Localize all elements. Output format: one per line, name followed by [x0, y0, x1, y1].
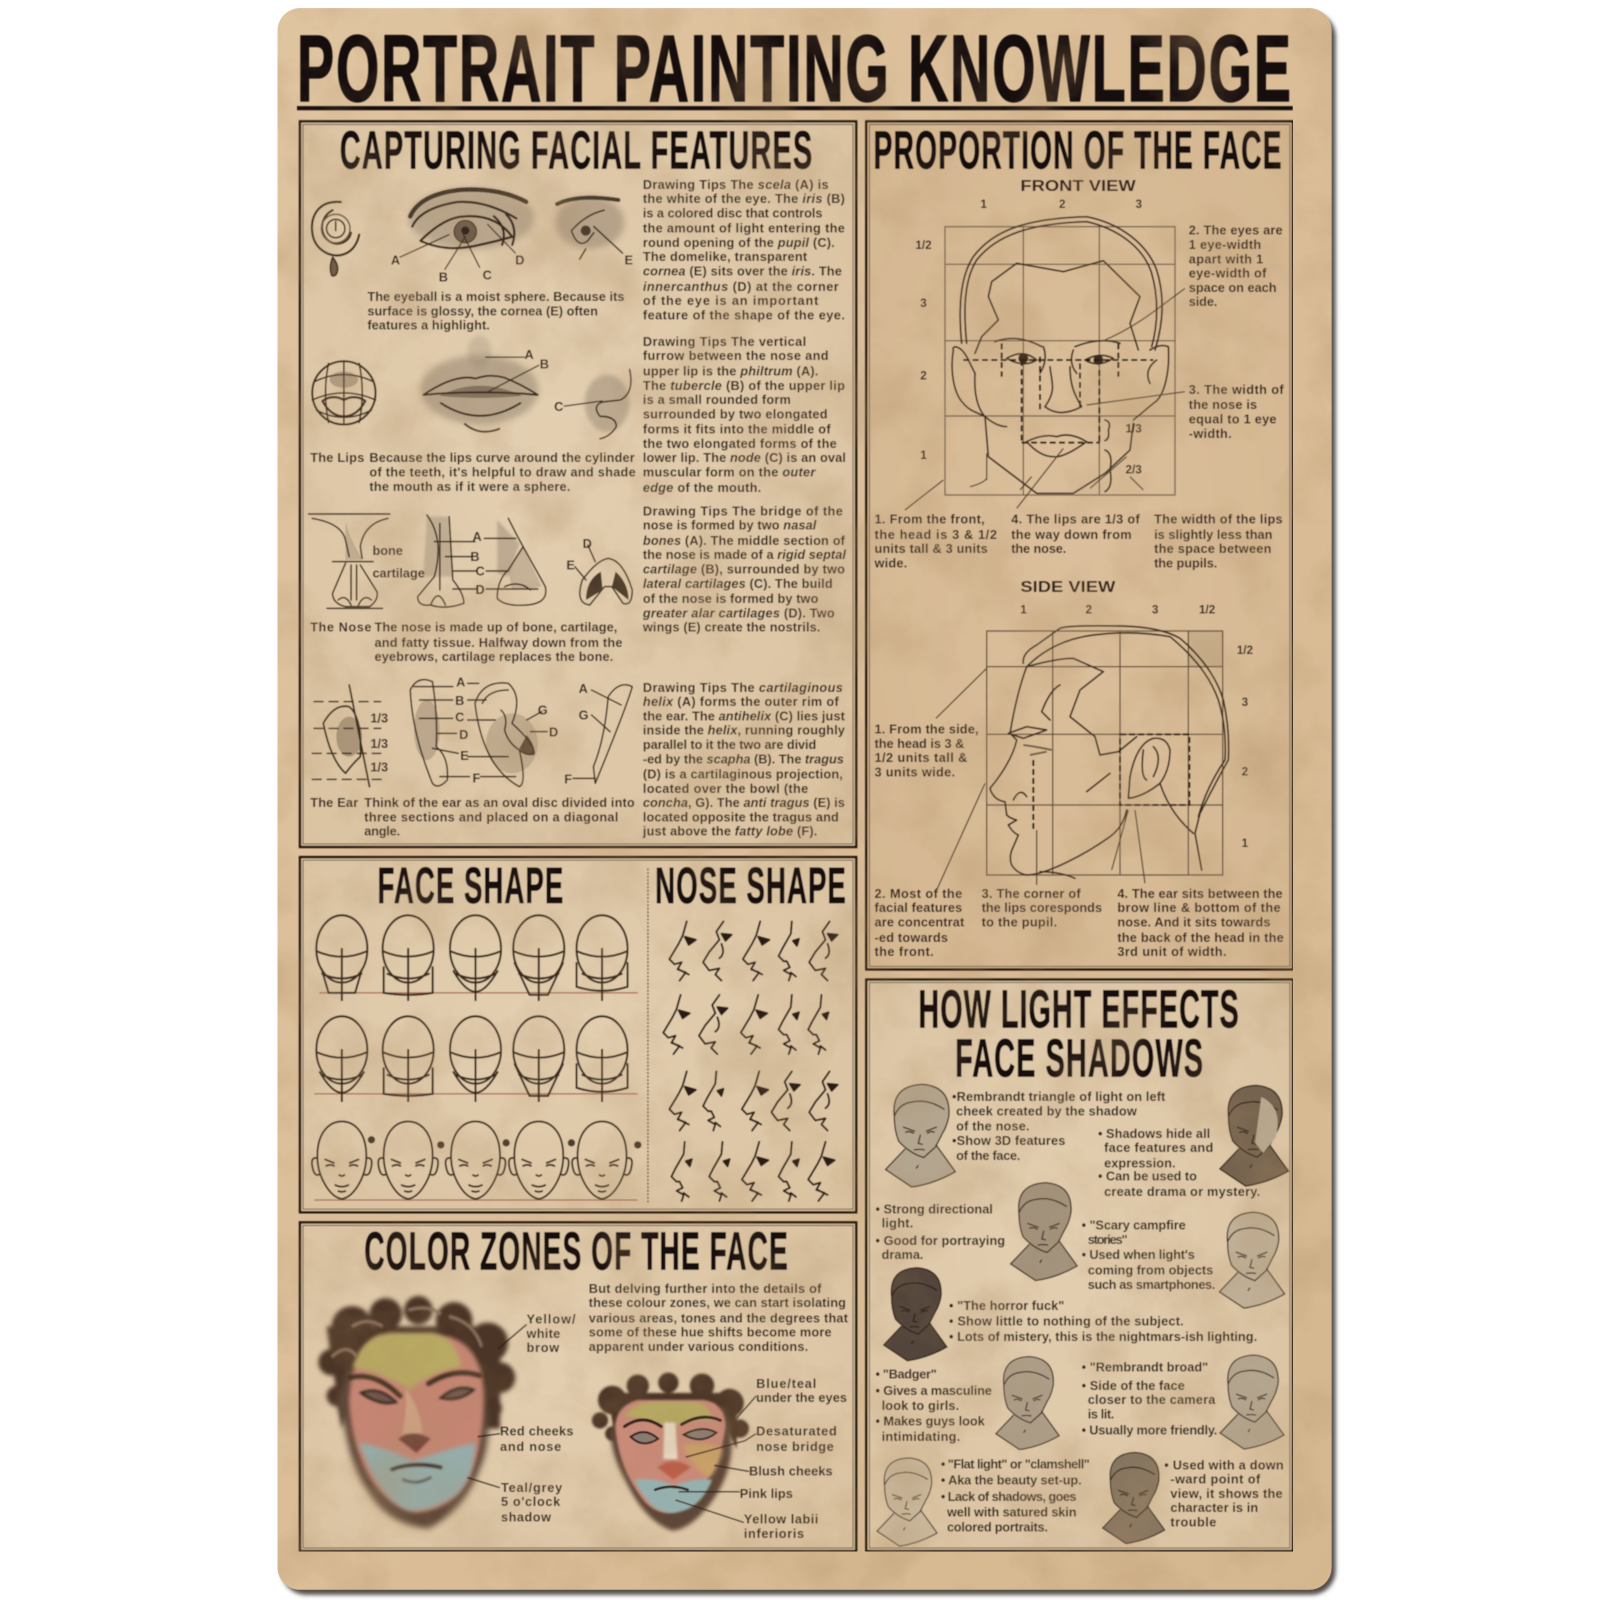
text: scary campfire: stories" — [1088, 1232, 1128, 1247]
labels: eye parts: A — [391, 252, 400, 267]
heading: capturing facial features: CAPTURING FACIAL FEATURES — [340, 120, 813, 180]
labels: front view units: 1 — [980, 198, 987, 211]
illustration: small face with colour zones — [592, 1372, 756, 1531]
text: nose drawing tips: greater alar cartilages (D). Two — [642, 605, 835, 620]
text: lips corner note: to the pupil. — [982, 915, 1057, 930]
text: ear caption — [310, 795, 635, 839]
text: colour zones intro: these colour zones, we can start isolating — [589, 1295, 846, 1310]
text: lips position note: the way down from — [1011, 527, 1132, 542]
panel: proportion of the face: 1/2 — [1199, 603, 1216, 616]
text: lips drawing tips: the two elongated forms of the — [643, 436, 837, 451]
panel: proportion of the face: 3 — [1136, 198, 1143, 211]
text: eye spacing note: side. — [1189, 294, 1217, 309]
text: ear drawing tips: helix (A) forms the outer rim of — [643, 694, 840, 709]
text: eyeball caption: features a highlight. — [367, 318, 490, 333]
panel: proportion of the face: 1 — [920, 449, 927, 462]
text: colour zones intro — [589, 1281, 849, 1354]
text: rembrandt broad: • Usually more friendly. — [1082, 1423, 1217, 1438]
text: ear drawing tips: the ear. The antihelix (C) lies just — [643, 708, 846, 723]
chart: front view face on grid — [905, 217, 1185, 510]
text: strong directional: light. — [882, 1216, 913, 1231]
text: front measurements note: 1. From the front, — [874, 511, 985, 526]
text: colour zones intro: But delving further into the details of — [589, 1281, 822, 1296]
text: facial features note — [874, 886, 965, 959]
labels: small face zones: Blush cheeks — [749, 1464, 833, 1479]
text: eye spacing note: space on each — [1189, 280, 1277, 295]
panel: capturing facial features: A — [472, 529, 482, 544]
text: colour zones intro: apparent under various conditions. — [589, 1339, 808, 1354]
text: lips width note: is slightly less than — [1154, 527, 1272, 542]
labels: large face zones: Teal/grey — [501, 1480, 563, 1495]
icon: bust downward — [1103, 1452, 1165, 1544]
text: nose width note: the nose is — [1189, 397, 1257, 412]
text: rembrandt broad — [1082, 1359, 1217, 1438]
panel: color zones of the face — [300, 1221, 856, 1551]
panel: capturing facial features: 1/3 — [370, 759, 388, 774]
text: facial features note: facial features — [874, 900, 962, 915]
text: eye drawing tips: Drawing Tips The scela (A) is — [643, 177, 829, 192]
text: nose drawing tips: lateral cartilages (C). The build — [643, 576, 833, 591]
panel: capturing facial features: A — [456, 675, 465, 690]
text: eyeball caption — [367, 289, 624, 333]
text: nose caption: The Nose — [310, 620, 371, 635]
panel: capturing facial features: B — [455, 693, 464, 708]
panel: capturing facial features: 1/3 — [370, 736, 388, 751]
text: flat light: • Aka the beauty set-up. — [941, 1473, 1082, 1488]
text: ear caption: three sections and placed on a diagonal — [364, 809, 618, 824]
labels: nose parts: bone — [372, 543, 403, 558]
heading: how light effects face shadows: HOW LIGHT EFFECTS — [918, 980, 1240, 1040]
text: horror: • Show little to nothing of the subject. — [949, 1314, 1184, 1329]
panel: capturing facial features: E — [460, 748, 469, 763]
text: downward view — [1164, 1457, 1284, 1530]
panel: proportion of the face: 2 — [1086, 603, 1093, 616]
illustration: large face with colour zones — [318, 1296, 527, 1529]
text: downward view: view, it shows the — [1170, 1486, 1283, 1501]
text: horror: • "The horror fuck" — [949, 1298, 1064, 1313]
text: nose drawing tips: wings (E) create the nostrils. — [642, 620, 820, 635]
text: nose drawing tips: bones (A). The middle section of — [643, 533, 846, 548]
panel: proportion of the face: 1/2 — [915, 239, 932, 252]
text: side measurements note: 1. From the side, — [874, 722, 979, 737]
text: eye drawing tips: cornea (E) sits over the iris. The — [643, 264, 842, 279]
text: eyeball caption: The eyeball is a moist sphere. Because its — [367, 289, 624, 304]
icon: bust dark shadow — [1220, 1085, 1288, 1186]
text: nose drawing tips: Drawing Tips The bridge of the — [643, 503, 843, 518]
text: nose caption: eyebrows, cartilage replaces the bone. — [374, 649, 613, 664]
panel: capturing facial features: A — [579, 681, 588, 696]
text: ear caption: The Ear — [310, 795, 358, 810]
text: rembrandt broad: • "Rembrandt broad" — [1082, 1359, 1208, 1374]
text: badger — [876, 1367, 992, 1444]
panel: how light effects face shadows — [866, 980, 1293, 1551]
text: side measurements note — [874, 722, 979, 780]
icon: bust flat light — [877, 1458, 937, 1546]
panel: capturing facial features: D — [476, 582, 485, 597]
text: lips position note: the nose. — [1011, 541, 1066, 556]
panel: capturing facial features: G — [579, 707, 589, 722]
text: lips width note: the pupils. — [1154, 555, 1217, 570]
heading: color zones of the face: COLOR ZONES OF THE FACE — [364, 1221, 789, 1281]
poster content — [297, 16, 1293, 1551]
text: strong directional: drama. — [882, 1247, 923, 1262]
text: lips corner note: the lips coresponds — [982, 900, 1102, 915]
text: rembrandt broad: • Side of the face — [1082, 1378, 1185, 1393]
text: rembrandt broad: is lit. — [1088, 1406, 1114, 1421]
labels: small face zones: nose bridge — [756, 1439, 834, 1454]
icon: bust directional — [1011, 1183, 1077, 1281]
panel: capturing facial features: B — [439, 270, 448, 285]
text: badger: • Makes guys look — [876, 1414, 986, 1429]
icon: side view of eye — [555, 196, 624, 259]
text: scary campfire: • "Scary campfire — [1082, 1218, 1186, 1233]
text: eye drawing tips: round opening of the pupil (C). — [643, 235, 835, 250]
labels: lip parts: A — [524, 347, 534, 362]
labels: large face zones: shadow — [501, 1509, 551, 1524]
text: lips width note: the space between — [1154, 541, 1271, 556]
panel: proportion of the face: 1/2 — [1237, 644, 1254, 657]
text: shadows: create drama or mystery. — [1104, 1184, 1260, 1199]
text: flat light: colored portraits. — [947, 1520, 1048, 1535]
text: ear drawing tips — [642, 680, 846, 839]
text: lips caption: The Lips — [310, 450, 364, 465]
text: ear position note: 3rd unit of width. — [1117, 944, 1227, 959]
text: flat light: • "Flat light" or "clamshell" — [941, 1456, 1090, 1471]
text: shadows: • Can be used to — [1098, 1169, 1197, 1184]
text: lips drawing tips — [643, 334, 846, 495]
text: nose drawing tips: the nose is made of a rigid septal — [643, 547, 846, 562]
text: facial features note: 2. Most of the — [874, 886, 962, 901]
labels: large face zones: Yellow/ — [527, 1311, 576, 1326]
heading: face shape: FACE SHAPE — [378, 857, 564, 914]
chart: nose shapes grid — [663, 921, 838, 1201]
text: facial features note: the front. — [874, 944, 934, 959]
text: ear caption: angle. — [364, 824, 400, 839]
panel: face shape and nose shape — [300, 857, 856, 1212]
text: nose width note: 3. The width of — [1189, 382, 1284, 397]
text: lips width note — [1154, 511, 1283, 570]
text: nose caption: The nose is made up of bone, cartilage, — [374, 620, 617, 635]
panel: capturing facial features: B — [470, 549, 480, 564]
text: ear position note: nose. And it sits towards — [1117, 915, 1270, 930]
icon: lips sphere — [312, 361, 376, 424]
text: side measurements note: the head is 3 & — [874, 736, 964, 751]
icon: eye drawing with labels — [400, 188, 535, 269]
text: eyeball caption: surface is glossy, the cornea (E) often — [367, 303, 598, 318]
panel: capturing facial features: G — [538, 702, 548, 717]
text: lips drawing tips: furrow between the nose and — [643, 348, 829, 363]
labels: small face zones: Pink lips — [740, 1486, 793, 1501]
text: eye drawing tips: feature of the shape of the eye. — [643, 307, 845, 322]
text: ear position note — [1117, 886, 1284, 959]
text: shadows: face features and — [1104, 1140, 1213, 1155]
text: side measurements note: 1/2 units tall & — [874, 750, 967, 765]
panel: capturing facial features: C — [483, 268, 492, 283]
panel: capturing facial features: C — [455, 709, 464, 724]
text: front measurements note: wide. — [873, 555, 907, 570]
text: front measurements note: units tall & 3 units — [874, 541, 988, 556]
text: ear drawing tips: just above the fatty lobe (F). — [642, 824, 817, 839]
panel: capturing facial features: F — [564, 772, 572, 787]
text: horror — [949, 1298, 1257, 1344]
chart: face shapes third row with features — [312, 1121, 641, 1199]
text: lips drawing tips: The tubercle (B) of the upper lip — [643, 378, 845, 393]
text: lips corner note — [982, 886, 1102, 930]
text: nose width note — [1189, 382, 1284, 441]
panel: capturing facial features: D — [583, 536, 592, 551]
text: eye spacing note: 2. The eyes are — [1189, 223, 1283, 238]
labels: small face zones — [740, 1376, 847, 1541]
text: rembrandt: of the face. — [956, 1148, 1020, 1163]
text: eye drawing tips — [643, 177, 845, 322]
text: lips caption: the mouth as if it were a sphere. — [369, 479, 570, 494]
labels: large face zones: brow — [527, 1340, 559, 1355]
text: ear position note: brow line & bottom of the — [1117, 900, 1281, 915]
panel: capturing facial features: D — [459, 727, 468, 742]
text: ear drawing tips: located opposite the tragus and — [643, 809, 839, 824]
icon: lips drawing — [420, 336, 539, 432]
text: ear caption: Think of the ear as an oval disc divided into — [364, 795, 635, 810]
heading: nose shape: NOSE SHAPE — [655, 857, 847, 914]
text: ear drawing tips: located over the bowl (the — [643, 781, 808, 796]
icon: nose drawings — [309, 514, 632, 608]
text: ear position note: 4. The ear sits between the — [1117, 886, 1283, 901]
panel: capturing facial features: B — [540, 356, 549, 371]
panel: capturing facial features: cartilage — [372, 566, 425, 581]
icon: ear drawings — [312, 680, 632, 787]
text: lips drawing tips: edge of the mouth. — [643, 480, 761, 495]
text: ear drawing tips: concha, G). The anti tragus (E) is — [643, 795, 845, 810]
text: badger: • Gives a masculine — [876, 1383, 992, 1398]
text: colour zones intro: various areas, tones and the degrees that — [589, 1310, 849, 1325]
metal sign background — [278, 8, 1336, 1595]
text: downward view: character is in — [1170, 1500, 1258, 1515]
text: nose drawing tips: cartilage (B), surrounded by two — [643, 561, 845, 576]
text: nose drawing tips: of the nose is formed by two — [643, 591, 819, 606]
heading: how light effects face shadows — [918, 980, 1240, 1089]
text: nose drawing tips: nose is formed by two nasal — [643, 518, 817, 533]
text: lips drawing tips: Drawing Tips The vertical — [643, 334, 806, 349]
labels: large face zones — [500, 1311, 576, 1524]
text: eye spacing note: 1 eye-width — [1189, 237, 1261, 252]
labels: large face zones: and nose — [500, 1439, 561, 1454]
text: lips drawing tips: is a small rounded form — [643, 392, 791, 407]
icon: bust campfire — [1219, 1212, 1285, 1308]
panel: capturing facial features: F — [472, 771, 480, 786]
labels: large face zones: Red cheeks — [500, 1424, 573, 1439]
text: facial features note: -ed towards — [874, 930, 948, 945]
panel: capturing facial features: C — [476, 564, 485, 579]
text: side measurements note: 3 units wide. — [874, 765, 955, 780]
panel: proportion of the face: 2 — [1242, 766, 1249, 779]
panel: proportion of the face: 2 — [1059, 198, 1066, 211]
heading: side view: SIDE VIEW — [1020, 579, 1115, 596]
text: scary campfire — [1082, 1218, 1215, 1292]
labels: small face zones: inferioris — [744, 1526, 804, 1541]
chart: face shapes first row — [316, 915, 628, 1001]
labels: small face zones: Desaturated — [756, 1424, 837, 1439]
chart: face shapes second row — [316, 1016, 628, 1102]
icon: side lips drawing — [564, 369, 631, 439]
text: rembrandt broad: closer to the camera — [1088, 1392, 1216, 1407]
text: downward view: -ward point of — [1170, 1472, 1261, 1487]
panel: proportion of the face: 3 — [1242, 696, 1249, 709]
text: nose caption — [310, 620, 622, 664]
text: eye drawing tips: innercanthus (D) at the corner — [643, 279, 839, 294]
text: horror: • Lots of mistery, this is the nightmars-ish lighting. — [949, 1329, 1257, 1344]
text: eye spacing note: eye-width of — [1189, 266, 1267, 281]
text: shadows — [1098, 1126, 1260, 1199]
text: lips drawing tips: upper lip is the philtrum (A). — [643, 364, 818, 379]
text: rembrandt: of the nose. — [956, 1119, 1030, 1134]
text: badger: look to girls. — [882, 1398, 959, 1413]
panel: proportion of the face: 3 — [1152, 603, 1159, 616]
labels: side view units: 1 — [1020, 603, 1027, 616]
heading: front view: FRONT VIEW — [1020, 178, 1136, 195]
text: ear drawing tips: -ed by the scapha (B). The tragus — [643, 751, 844, 766]
text: rembrandt — [952, 1089, 1166, 1163]
panel: capturing facial features: E — [566, 557, 575, 572]
text: nose width note: -width. — [1189, 426, 1232, 441]
text: lips corner note: 3. The corner of — [982, 886, 1081, 901]
text: strong directional: • Strong directional — [876, 1201, 993, 1216]
text: flat light: • Lack of shadows, goes — [941, 1489, 1077, 1504]
labels: small face zones: under the eyes — [756, 1390, 847, 1405]
text: scary campfire: coming from objects — [1088, 1262, 1213, 1277]
text: downward view: • Used with a down — [1164, 1457, 1284, 1472]
text: rembrandt: •Show 3D features — [952, 1133, 1065, 1148]
text: eye drawing tips: is a colored disc that controls — [643, 205, 822, 220]
panel: proportion of the face — [866, 120, 1293, 969]
text: eye drawing tips: The domelike, transparent — [643, 249, 808, 264]
text: badger: intimidating. — [882, 1429, 960, 1444]
text: strong directional — [876, 1201, 1005, 1262]
panel: proportion of the face: 3 — [920, 297, 927, 310]
panel: capturing facial features: D — [549, 725, 558, 740]
text: eye drawing tips: of the eye is an important — [643, 293, 819, 308]
labels: ear parts: 1/3 — [370, 710, 388, 725]
text: scary campfire: • Used when light's — [1082, 1247, 1195, 1262]
text: lips caption — [310, 450, 636, 494]
text: lips position note: 4. The lips are 1/3 of — [1011, 511, 1141, 526]
panel: capturing facial features: D — [515, 252, 525, 267]
text: eye drawing tips: the white of the eye. The iris (B) — [643, 191, 845, 206]
icon: bust broad — [1220, 1355, 1284, 1449]
text: eye drawing tips: the amount of light entering the — [643, 221, 845, 236]
icon: bust badger — [996, 1357, 1059, 1450]
text: shadows: • Shadows hide all — [1098, 1126, 1210, 1141]
icon: bust rembrandt — [886, 1084, 955, 1187]
text: ear drawing tips: (D) is a cartilaginous projection, — [643, 767, 843, 782]
text: lips drawing tips: muscular form on the outer — [643, 465, 816, 480]
text: eye spacing note — [1189, 223, 1283, 309]
text: nose width note: equal to 1 eye — [1189, 411, 1277, 426]
text: colour zones intro: some of these hue shifts become more — [589, 1325, 832, 1340]
text: rembrandt: •Rembrandt triangle of light on left — [952, 1089, 1166, 1104]
text: lips caption: of the teeth, it's helpful to draw and shade — [369, 465, 636, 480]
text: ear drawing tips: parallel to it the two are divid — [643, 737, 816, 752]
text: lips position note — [1011, 511, 1141, 556]
text: strong directional: • Good for portraying — [876, 1233, 1005, 1248]
panel: proportion of the face: 2 — [920, 370, 927, 383]
text: ear drawing tips: inside the helix, running roughly — [643, 723, 846, 738]
text: nose caption: and fatty tissue. Halfway down from the — [374, 635, 622, 650]
text: flat light — [941, 1456, 1090, 1535]
text: lips caption: Because the lips curve around the cylinder — [369, 450, 635, 465]
text: flat light: well with satured skin — [946, 1504, 1077, 1519]
chart: side view head on grid — [936, 626, 1229, 890]
panel: capturing facial features: C — [554, 399, 563, 414]
panel: proportion of the face: 2/3 — [1126, 463, 1142, 476]
text: rembrandt: cheek created by the shadow — [956, 1103, 1137, 1118]
heading: how light effects face shadows: FACE SHADOWS — [955, 1029, 1204, 1089]
text: front measurements note — [873, 511, 997, 570]
panel: proportion of the face: 1 — [1242, 837, 1249, 850]
text: lips width note: The width of the lips — [1154, 511, 1283, 526]
labels: large face zones: white — [526, 1326, 560, 1341]
labels: front view fractions: 1/3 — [1126, 423, 1142, 436]
text: ear position note: the back of the head in the — [1117, 930, 1284, 945]
text: downward view: trouble — [1170, 1515, 1216, 1530]
text: lips drawing tips: forms it fits into the middle of — [643, 422, 831, 437]
text: scary campfire: such as smartphones. — [1088, 1277, 1215, 1292]
text: lips drawing tips: lower lip. The node (C) is an oval — [643, 450, 846, 465]
icon: eyeball with tear — [312, 202, 359, 276]
labels: small face zones: Yellow labii — [744, 1511, 818, 1526]
text: lips drawing tips: surrounded by two elongated — [643, 406, 828, 421]
text: nose drawing tips — [642, 503, 846, 635]
text: eye spacing note: apart with 1 — [1189, 251, 1263, 266]
text: shadows: expression. — [1104, 1155, 1176, 1170]
text: front measurements note: the head is 3 & 1/2 — [874, 527, 997, 542]
panel: capturing facial features — [300, 120, 856, 847]
text: ear drawing tips: Drawing Tips The cartilaginous — [643, 680, 843, 695]
text: facial features note: are concentrat — [874, 915, 965, 930]
labels: small face zones: Blue/teal — [756, 1376, 816, 1391]
text: badger: • "Badger" — [876, 1367, 937, 1382]
icon: bust horror — [884, 1268, 947, 1361]
labels: large face zones: 5 o'clock — [501, 1494, 561, 1509]
panel: capturing facial features: E — [624, 252, 633, 267]
